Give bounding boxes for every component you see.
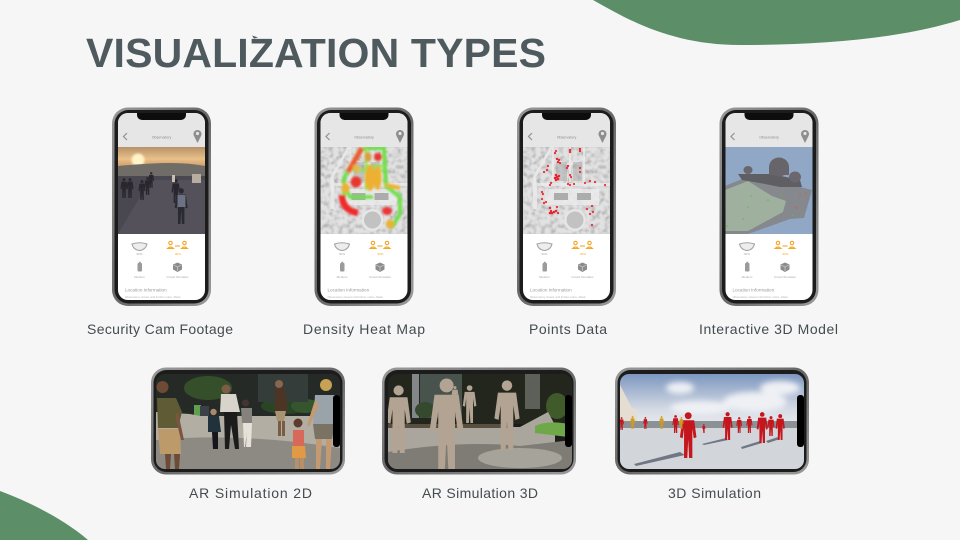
stat labels: Medium [134, 275, 145, 279]
blonde woman [307, 379, 338, 469]
stat labels: Crowd Simulator [369, 275, 391, 279]
screen image: heat map [320, 147, 408, 234]
phone: ar simulation 3d [382, 368, 576, 474]
screen image: red figures on a terrace [619, 374, 804, 469]
title: VISUALIZATION TYPES [86, 30, 546, 76]
screen image: map with red points [523, 147, 610, 234]
screen image: flat illustrated people on street [156, 374, 340, 469]
label: ar simulation 3d: AR Simulation 3D [422, 485, 538, 501]
stat labels: 90% [580, 252, 586, 256]
man in olive shirt [156, 381, 184, 469]
stat labels: Crowd Simulator [774, 275, 796, 279]
phone: density heat map [314, 108, 414, 306]
stat labels: 90% [744, 252, 750, 256]
screen image: sunset terrace camera view [118, 147, 205, 234]
label: density heat map: Density Heat Map [303, 321, 425, 337]
woman in brown top [275, 380, 288, 436]
location information: Location Information [125, 288, 167, 292]
location information: Location Information [530, 288, 572, 292]
stat labels: Crowd Simulator [571, 275, 594, 279]
stat labels: Crowd Simulator [166, 275, 189, 279]
location information: Location Information [328, 288, 370, 292]
location information: Location Information [732, 288, 775, 292]
header text: Observatory [152, 136, 171, 140]
location information [732, 288, 788, 299]
label: ar simulation 2d: AR Simulation 2D [189, 485, 312, 501]
location information [530, 288, 586, 299]
stat labels: 90% [136, 252, 143, 256]
location information [328, 288, 383, 299]
stat labels: Medium [337, 275, 348, 279]
label: interactive 3d model: Interactive 3D Model [699, 321, 838, 337]
label: points data: Points Data [529, 321, 607, 337]
stat labels: 90% [782, 252, 789, 256]
location information: Observatory closed until further notice. Mask [530, 295, 586, 299]
phone: interactive 3d model [720, 108, 818, 306]
stat labels: Medium [539, 275, 550, 279]
location information: Observatory closed until further notice. Mask [328, 295, 383, 299]
header text: Observatory [557, 136, 576, 140]
decorative blob: bottom left [0, 491, 88, 540]
phone: points data [517, 108, 616, 306]
header text: Observatory [759, 136, 779, 140]
label: 3d simulation: 3D Simulation [668, 485, 761, 501]
header text: Observatory [354, 136, 374, 140]
stat labels: 90% [339, 252, 345, 256]
stat labels: 90% [175, 252, 181, 256]
stat labels [539, 252, 594, 279]
girl in red top [292, 418, 306, 469]
stat labels: 90% [541, 252, 548, 256]
stat labels [742, 252, 796, 279]
phone: 3d simulation [615, 368, 809, 474]
stat labels [134, 252, 189, 279]
child in dark jacket [208, 409, 221, 449]
location information: Observatory closed until further notice. Mask [125, 295, 181, 299]
decorative blob: top right [593, 0, 960, 45]
phone: security cam footage [112, 108, 211, 306]
label: security cam footage: Security Cam Footage [87, 321, 233, 337]
screen image: 3d mannequins on street [386, 374, 572, 471]
phone: ar simulation 2d [151, 368, 345, 474]
stat labels: Medium [742, 275, 753, 279]
red data points [541, 148, 606, 226]
man in white shirt [220, 384, 240, 449]
woman in grey top [241, 400, 252, 447]
stat labels [337, 252, 391, 279]
stat labels: 90% [377, 252, 384, 256]
screen image: 3d observatory model [725, 147, 812, 234]
location information [125, 288, 181, 299]
location information: Observatory closed until further notice. Mask [732, 295, 788, 299]
